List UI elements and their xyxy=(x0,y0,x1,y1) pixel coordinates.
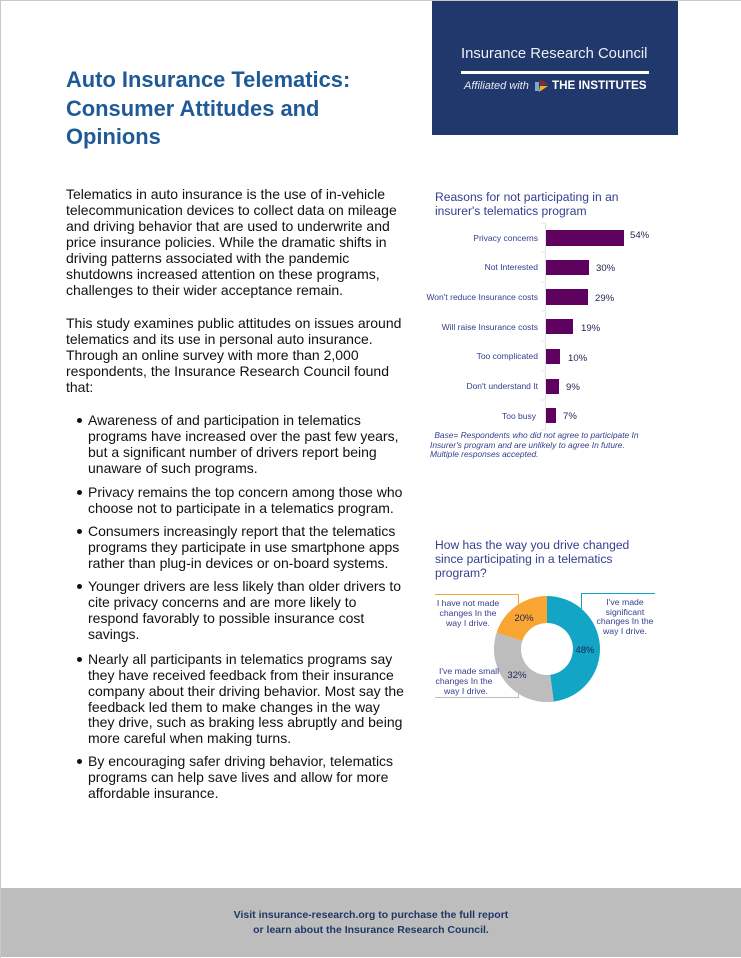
bullet: feedback: Nearly all participants in telematics programs say xyxy=(88,651,392,667)
study paragraph: This study examines public attitudes on issues around xyxy=(66,315,401,331)
bar: not interested xyxy=(485,260,616,275)
bar: too busy: Too busy xyxy=(502,411,537,421)
study paragraph: Through an online survey with more than 2,000 xyxy=(66,347,359,363)
callout: small changes: I've made small xyxy=(439,666,499,676)
bullet: safer driving: affordable insurance. xyxy=(88,785,218,801)
intro paragraph xyxy=(66,186,397,298)
donut chart heading: program? xyxy=(435,566,487,580)
footer call to action: or learn about the Insurance Research Council. xyxy=(253,924,489,936)
bar: don't understand: Don't understand It xyxy=(466,381,539,391)
bar: will raise costs: 19% xyxy=(581,323,601,334)
bar: not interested: 30% xyxy=(596,263,616,274)
donut chart heading: since participating in a telematics xyxy=(435,552,612,566)
callout: significant changes: significant xyxy=(606,607,645,617)
bullet: feedback: company about their driving behavior. Most say the xyxy=(88,683,404,699)
bar: too complicated xyxy=(477,349,588,364)
callout: significant changes: way I drive. xyxy=(602,626,647,636)
bullet: smartphone apps: rather than plug-in devices or on-board systems. xyxy=(88,555,388,571)
bar: will raise costs: Will raise Insurance costs xyxy=(442,322,538,332)
bar: too busy: 7% xyxy=(563,411,577,422)
bullet: feedback: more careful when making turns. xyxy=(88,730,291,746)
organisation name: Insurance Research Council xyxy=(461,46,647,62)
callout: significant changes: I've made xyxy=(606,597,644,607)
intro paragraph: and driving behavior that are used to underwrite and xyxy=(66,218,390,234)
bullet: younger drivers xyxy=(77,578,401,642)
intro paragraph: driving patterns associated with the pandemic xyxy=(66,250,349,266)
bullet: privacy: choose not to participate in a telematics program. xyxy=(88,500,394,516)
bar: too complicated: 10% xyxy=(568,353,588,364)
bullet: feedback: feedback led them to make changes in the way xyxy=(88,699,380,715)
footer band xyxy=(1,888,741,957)
intro paragraph: price insurance policies. While the dramatic shifts in xyxy=(66,234,387,250)
bullet: smartphone apps: Consumers increasingly report that the telematics xyxy=(88,523,395,539)
bullet: privacy xyxy=(77,484,402,516)
donut chart heading: How has the way you drive changed xyxy=(435,538,629,552)
bullet: smartphone apps xyxy=(77,523,399,571)
footer call to action: Visit insurance-research.org to purchase the full report xyxy=(234,909,508,921)
intro paragraph: telecommunication devices to collect data on mileage xyxy=(66,202,397,218)
chart footnote: Base= Respondents who did not agree to participate In xyxy=(432,430,639,440)
donut segments xyxy=(494,596,600,702)
bullet: safer driving: programs can help save lives and allow for more xyxy=(88,769,388,785)
bullet: awareness: programs have increased over the past few years, xyxy=(88,428,398,444)
bar: privacy concerns: Privacy concerns xyxy=(473,233,538,243)
intro paragraph: Telematics in auto insurance is the use of in-vehicle xyxy=(66,186,385,202)
bullet: awareness: Awareness of and participation in telematics xyxy=(88,412,361,428)
bullet: younger drivers: cite privacy concerns and are more likely to xyxy=(88,594,356,610)
bullet: awareness xyxy=(77,412,398,476)
callout: no changes: changes In the xyxy=(440,608,497,618)
bar: won't reduce costs xyxy=(426,289,615,305)
bar: won't reduce costs: Won't reduce Insurance costs xyxy=(426,292,538,302)
bullet: awareness: but a significant number of drivers report being xyxy=(88,444,377,460)
icon: The Institutes mark xyxy=(535,79,548,92)
bullet list of findings xyxy=(77,412,404,801)
bullet: privacy: Privacy remains the top concern among those who xyxy=(88,484,402,500)
bar: privacy concerns xyxy=(473,230,650,246)
bullet: feedback: they have received feedback from their insurance xyxy=(88,667,394,683)
bullet: younger drivers: Younger drivers are less likely than older drivers to xyxy=(88,578,401,594)
segment value labels: 32% xyxy=(507,670,527,681)
study paragraph xyxy=(66,315,401,395)
callout: significant changes: changes In the xyxy=(596,616,654,626)
footer call to action xyxy=(234,909,508,936)
title: Consumer Attitudes and xyxy=(66,96,319,121)
institutes name: THE INSTITUTES xyxy=(552,79,647,92)
bar: won't reduce costs: 29% xyxy=(595,293,615,304)
affiliation text: Affiliated with xyxy=(464,80,529,92)
bar: will raise costs xyxy=(442,319,601,334)
bullet: smartphone apps: programs they participate in use smartphone apps xyxy=(88,539,399,555)
title xyxy=(66,67,350,149)
study paragraph: that: xyxy=(66,379,93,395)
bar: too busy xyxy=(502,408,577,423)
segment value labels xyxy=(507,613,595,681)
study paragraph: respondents, the Insurance Research Council found xyxy=(66,363,389,379)
bar: privacy concerns: 54% xyxy=(630,230,650,241)
logo banner xyxy=(432,1,678,135)
callout: no changes: I have not made xyxy=(437,598,499,608)
chart footnote: Insurer's program and are unlikely to agree In future. xyxy=(430,440,625,450)
study paragraph: telematics and its use in personal auto insurance. xyxy=(66,331,373,347)
intro paragraph: challenges to their wider acceptance remain. xyxy=(66,282,343,298)
bullet: feedback xyxy=(77,651,404,746)
chart footnote: Multiple responses accepted. xyxy=(430,449,538,459)
bar chart heading: insurer's telematics program xyxy=(435,204,587,218)
bullet: safer driving xyxy=(77,753,393,801)
bullet: younger drivers: respond favorably to possible insurance cost xyxy=(88,610,364,626)
callout: small changes: changes In the xyxy=(436,676,493,686)
bullet: safer driving: By encouraging safer driving behavior, telematics xyxy=(88,753,393,769)
title: Opinions xyxy=(66,124,161,149)
bar: don't understand xyxy=(466,379,580,394)
donut chart: driving changes xyxy=(435,538,655,702)
segment value labels: 20% xyxy=(514,613,534,624)
bullet: younger drivers: savings. xyxy=(88,626,139,642)
bar chart: reasons for not participating xyxy=(426,190,650,459)
bar: too complicated: Too complicated xyxy=(477,351,538,361)
intro paragraph: shutdowns increased attention on these programs, xyxy=(66,266,380,282)
bar: don't understand: 9% xyxy=(566,382,580,393)
bar chart heading: Reasons for not participating in an xyxy=(435,190,619,204)
bullet: awareness: unaware of such programs. xyxy=(88,460,258,476)
callout: no changes: way I drive. xyxy=(445,618,490,628)
bar: not interested: Not Interested xyxy=(485,262,538,272)
segment value labels: 48% xyxy=(575,645,595,656)
callout: small changes: way I drive. xyxy=(443,686,488,696)
bullet: feedback: they drive, such as braking less abruptly and being xyxy=(88,714,402,730)
title: Auto Insurance Telematics: xyxy=(66,67,350,92)
